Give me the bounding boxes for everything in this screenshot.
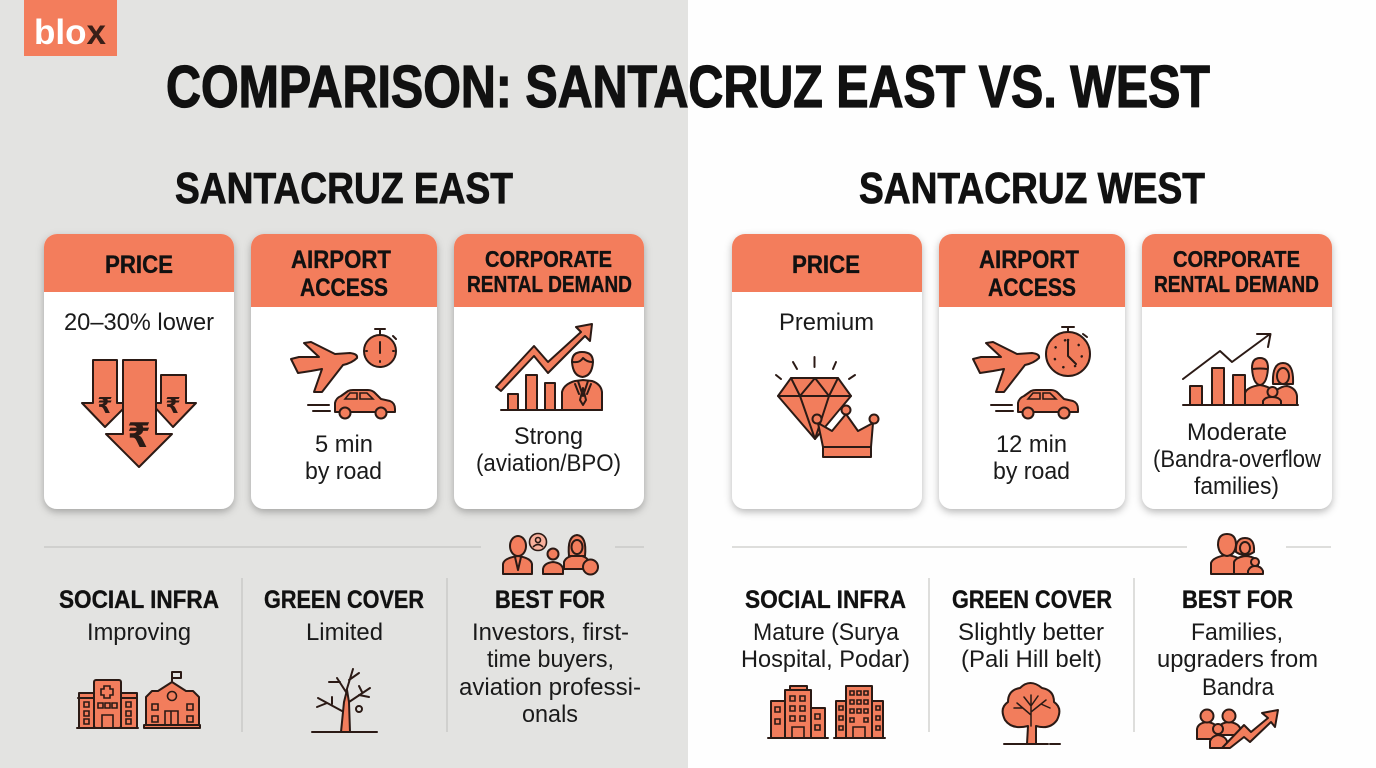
- label: corporate rental demand: RENTAL DEMAND: [467, 271, 632, 297]
- column: West social infra: SOCIAL INFRA: [745, 586, 906, 614]
- label: corporate rental demand: CORPORATE: [1173, 246, 1300, 272]
- value: investors, first-time buyers, aviation professionals: Investors, first-: [472, 619, 629, 646]
- column: East best for: [459, 586, 641, 728]
- label: airport access: ACCESS: [988, 274, 1076, 302]
- label: corporate rental demand: RENTAL DEMAND: [1154, 271, 1319, 297]
- value: premium: Premium: [779, 309, 874, 336]
- heading: Santacruz West: SANTACRUZ WEST: [859, 165, 1205, 213]
- icon: leafy tree: [1003, 683, 1060, 744]
- icon: stopwatch: [364, 329, 396, 367]
- icon: car: [308, 390, 395, 418]
- card: East airport access: [251, 234, 437, 509]
- value: improving: Improving: [87, 619, 191, 646]
- value: slightly better (Pali Hill belt): (Pali Hill belt): [961, 646, 1102, 673]
- icon: growth chart with family: [1183, 334, 1298, 405]
- value: moderate (Bandra-overflow families): Moderate: [1187, 419, 1287, 446]
- column: East green cover: [264, 586, 424, 732]
- icon: family with rising arrow: [1197, 710, 1278, 748]
- heading: Santacruz East: SANTACRUZ EAST: [175, 165, 513, 213]
- icon: falling rupee arrows: ₹: [165, 394, 181, 419]
- label: price: PRICE: [792, 251, 860, 279]
- panel: left background: [0, 0, 688, 768]
- icon: plane: [291, 342, 357, 392]
- column: East green cover: GREEN COVER: [264, 586, 424, 614]
- icon: falling rupee arrows: ₹: [97, 394, 113, 419]
- label: airport access: AIRPORT: [979, 246, 1079, 274]
- column: West green cover: [952, 586, 1112, 744]
- icon: plane: [973, 342, 1039, 392]
- card: West airport access: [939, 234, 1125, 509]
- column: West best for: BEST FOR: [1182, 586, 1293, 614]
- value: investors, first-time buyers, aviation professionals: onals: [522, 701, 578, 728]
- card: East price: [44, 234, 234, 509]
- icon: falling rupee arrows: [82, 360, 196, 467]
- icon: falling rupee arrows: ₹: [127, 416, 151, 456]
- value: 20-30% lower: 20–30% lower: [64, 309, 214, 336]
- icon: bare tree: [312, 669, 377, 732]
- column: West social infra: [741, 586, 910, 738]
- column: East social infra: SOCIAL INFRA: [59, 586, 219, 614]
- value: 12 min by road: 12 min: [996, 431, 1067, 458]
- value: moderate (Bandra-overflow families): families): [1194, 473, 1279, 500]
- value: limited: Limited: [306, 619, 383, 646]
- icon: stopwatch: [1046, 327, 1090, 376]
- value: mature (Surya Hospital, Podar): Hospital, Podar): [741, 646, 910, 673]
- value: mature (Surya Hospital, Podar): Mature (Surya: [753, 619, 899, 646]
- icon: growth chart with businessman: [496, 324, 602, 410]
- value: 12 min by road: by road: [993, 458, 1070, 485]
- card: West corporate rental demand: [1142, 234, 1332, 509]
- logo: blox: blox: [34, 13, 107, 52]
- value: families, upgraders from Bandra: Bandra: [1202, 674, 1274, 701]
- label: price: PRICE: [105, 251, 173, 279]
- icon: diamond and crown: [776, 357, 878, 457]
- column: West green cover: GREEN COVER: [952, 586, 1112, 614]
- value: 5 min by road: by road: [305, 458, 382, 485]
- value: slightly better (Pali Hill belt): Slightly better: [958, 619, 1104, 646]
- label: airport access: AIRPORT: [291, 246, 391, 274]
- icon: hospital and school: [77, 672, 200, 728]
- icon: car: [991, 390, 1078, 418]
- value: moderate (Bandra-overflow families): (Bandra-overflow: [1153, 446, 1321, 473]
- label: corporate rental demand: CORPORATE: [485, 246, 612, 272]
- value: strong (aviation/BPO): (aviation/BPO): [476, 450, 621, 477]
- value: investors, first-time buyers, aviation professionals: time buyers,: [487, 646, 614, 673]
- value: 5 min by road: 5 min: [315, 431, 373, 458]
- value: families, upgraders from Bandra: upgraders from: [1157, 646, 1318, 673]
- card: East corporate rental demand: [454, 234, 644, 509]
- value: families, upgraders from Bandra: Families,: [1191, 619, 1283, 646]
- column: East best for: BEST FOR: [495, 586, 605, 614]
- logo: blox: [24, 0, 117, 56]
- column: West best for: [1157, 586, 1318, 748]
- column: East social infra: [59, 586, 219, 728]
- value: strong (aviation/BPO): Strong: [514, 423, 583, 450]
- label: airport access: ACCESS: [300, 274, 388, 302]
- card: West price: [732, 234, 922, 509]
- value: investors, first-time buyers, aviation professionals: aviation professi-: [459, 674, 641, 701]
- icon: East people group: [503, 534, 598, 574]
- icon: city buildings: [768, 686, 885, 738]
- icon: West family: [1211, 534, 1263, 574]
